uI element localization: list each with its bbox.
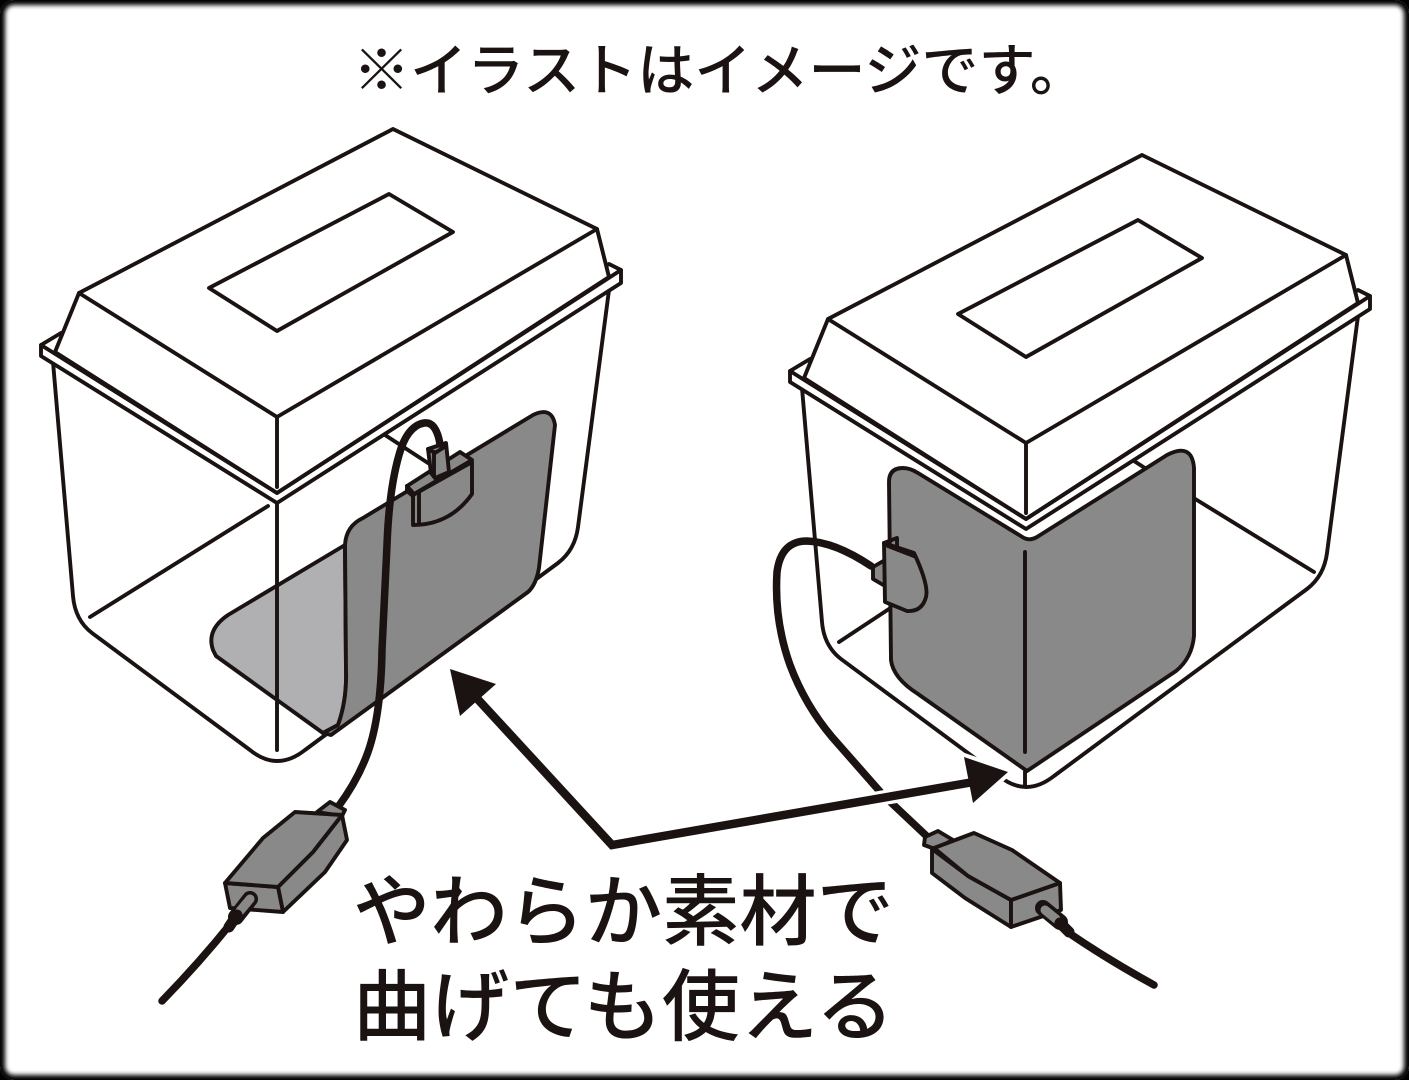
right container body [802, 316, 1358, 787]
left container floor lines [90, 435, 428, 617]
right lid top face [790, 255, 1370, 519]
right container lid [804, 155, 1358, 519]
left panel floor section [211, 545, 346, 733]
left panel upright section [323, 412, 555, 735]
caption [353, 868, 894, 1051]
illustration: left container with bent panel [41, 129, 621, 1001]
right controller box [924, 831, 1154, 985]
left container lid [55, 129, 609, 493]
left panel connector flap [407, 443, 472, 525]
illustration: right container with folded panel [777, 155, 1370, 985]
right panel connector flap [873, 538, 926, 611]
right container front corner [1023, 772, 1027, 786]
right container rim [790, 290, 1370, 529]
left lid label recess [209, 194, 453, 331]
right container floor lines [839, 461, 1314, 642]
right folded panel [889, 451, 1194, 771]
left container front edge [275, 503, 279, 750]
right cable [777, 541, 934, 843]
right lid label recess [958, 220, 1202, 357]
left controller box [162, 802, 347, 1001]
title note: ※イラストはイメージです。 [353, 39, 1087, 102]
left container body [53, 290, 609, 761]
right panel fold line [1023, 552, 1027, 752]
left lid top face [41, 229, 621, 493]
caption: やわらか素材で [353, 868, 894, 956]
caption: 曲げても使える [353, 963, 894, 1051]
left cable [338, 423, 440, 807]
left container rim [41, 264, 621, 503]
double-headed arrow [450, 669, 1008, 845]
